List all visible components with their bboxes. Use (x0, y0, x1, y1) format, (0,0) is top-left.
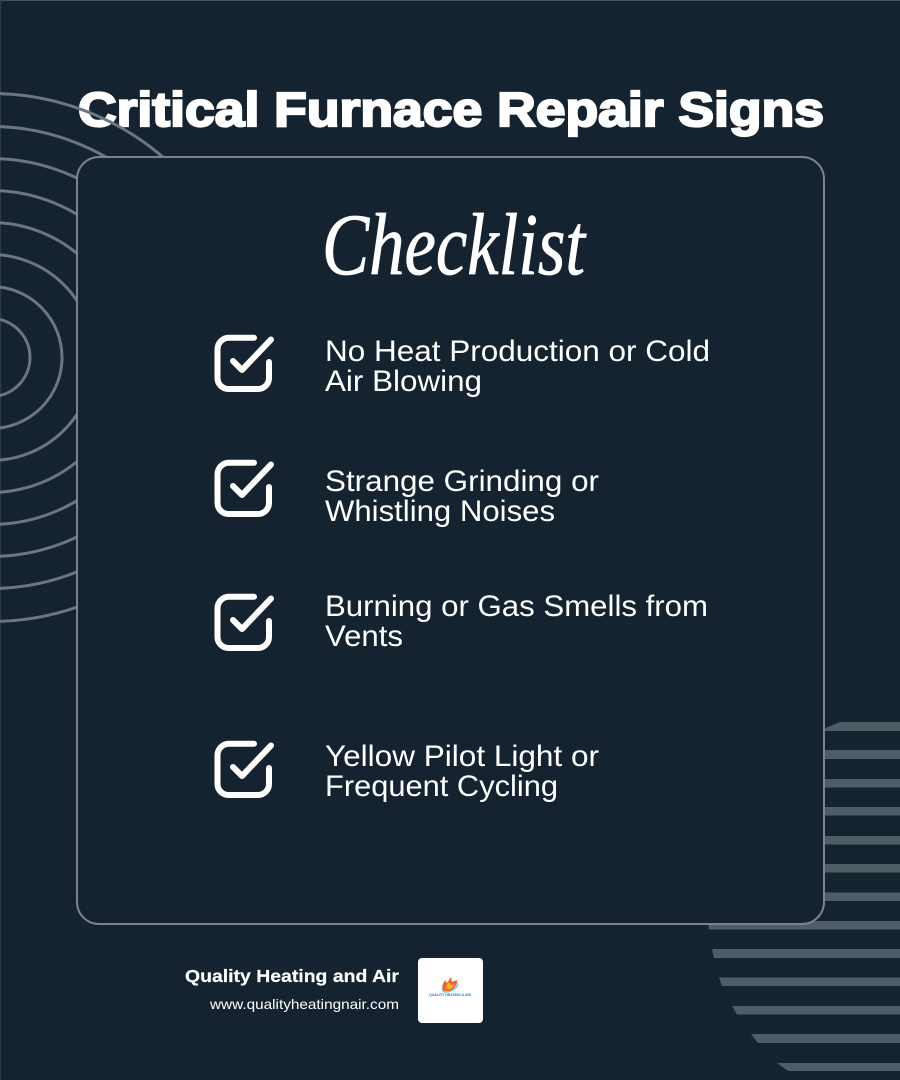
logo: QUALITY HEATING & AIR (429, 992, 471, 997)
checklist item 1: Air Blowing (325, 365, 482, 398)
checklist item 3: Burning or Gas Smells from (325, 590, 708, 623)
checklist item 4: Yellow Pilot Light or (325, 740, 599, 773)
footer: website: www.qualityheatingnair.com (209, 996, 399, 1012)
logo (418, 958, 483, 1023)
icon: checkbox 2 (218, 463, 271, 514)
checklist item 2: Strange Grinding or (325, 465, 599, 498)
checklist heading: Checklist (322, 197, 587, 294)
checklist item 2: Whistling Noises (325, 495, 555, 528)
checklist item 3: Vents (325, 620, 403, 653)
panel: checklist (77, 157, 824, 924)
icon: checkbox 1 (218, 338, 271, 389)
checklist item 4 (325, 740, 599, 803)
title: Critical Furnace Repair Signs (78, 84, 824, 137)
checklist item 4: Frequent Cycling (325, 770, 558, 803)
checklist item 3 (325, 590, 708, 653)
icon: checkbox 4 (218, 744, 271, 795)
checklist item 2 (325, 465, 599, 528)
checklist item 1: No Heat Production or Cold (325, 335, 710, 368)
footer: company name: Quality Heating and Air (185, 966, 399, 986)
icon: checkbox 3 (218, 597, 271, 648)
checklist item 1 (325, 335, 710, 398)
